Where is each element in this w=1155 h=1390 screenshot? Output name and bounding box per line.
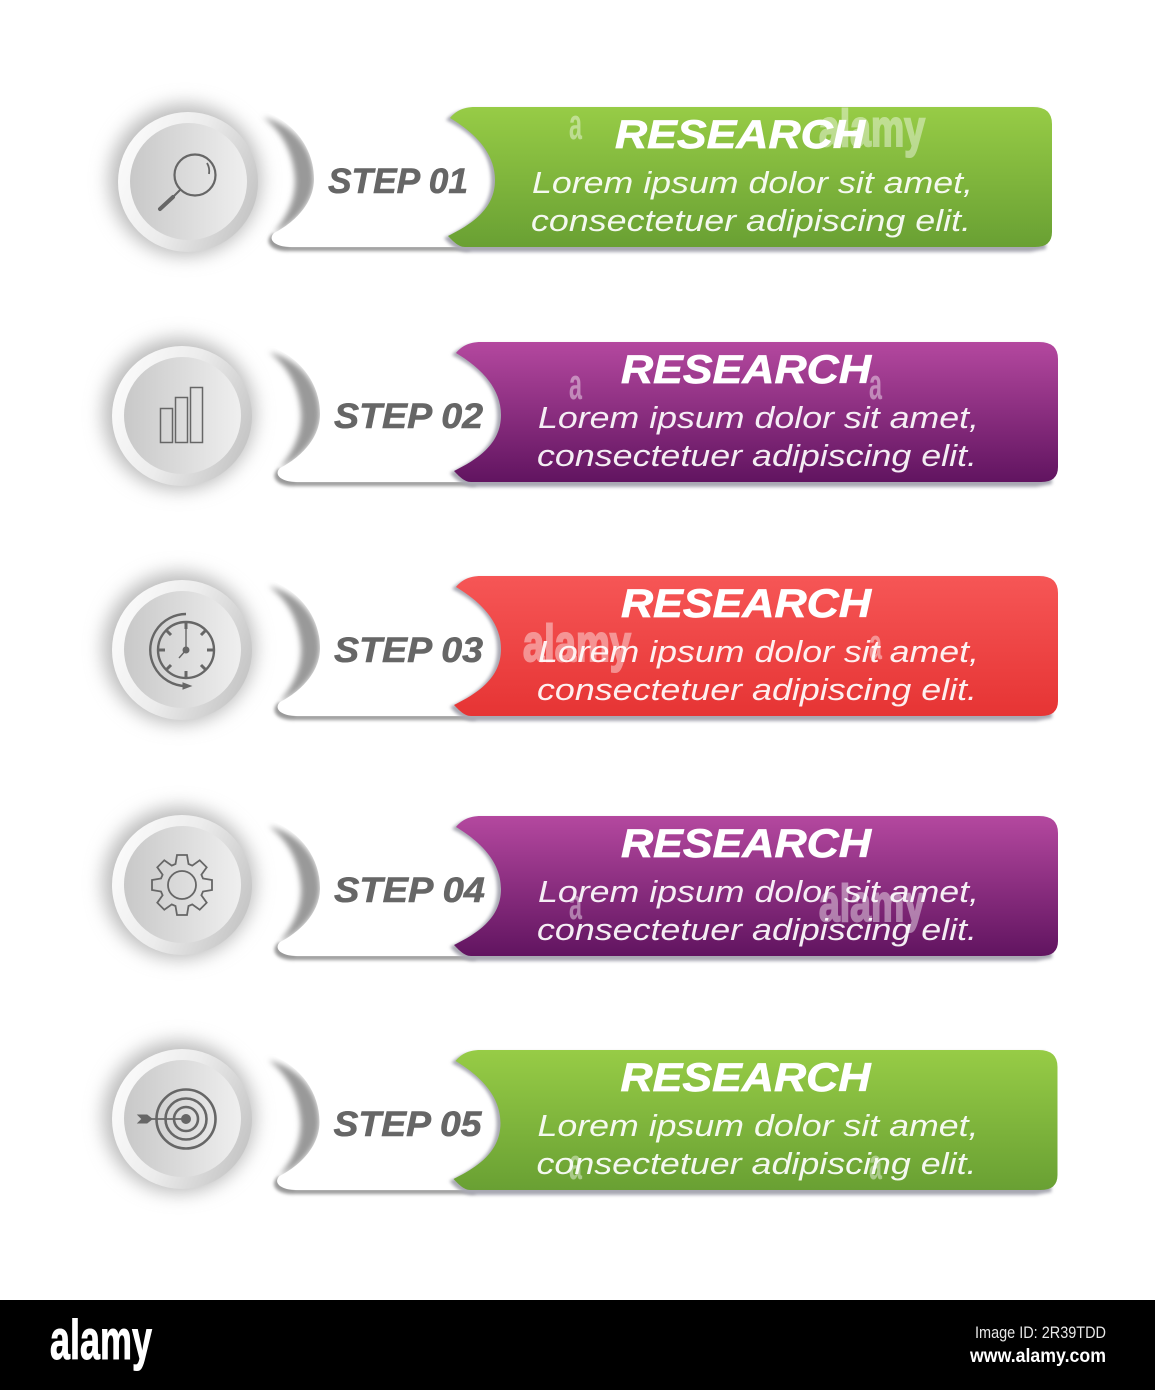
watermarks: a [869, 620, 882, 669]
heading 2: RESEARCH [621, 348, 872, 392]
body text 1: consectetuer adipiscing elit. [531, 203, 971, 238]
body text 2: consectetuer adipiscing elit. [537, 438, 977, 473]
icon: clock [150, 614, 214, 689]
body text 3: Lorem ipsum dolor sit amet, [538, 634, 979, 669]
step 01 row [109, 104, 1052, 256]
body text 5: consectetuer adipiscing elit. [536, 1146, 976, 1181]
step tab 5 [268, 1055, 486, 1194]
step 02 row [103, 338, 1058, 490]
panel: purple research 4 [450, 816, 1058, 961]
step 05 row [103, 1041, 1058, 1195]
watermarks [523, 100, 925, 1189]
body text 5: Lorem ipsum dolor sit amet, [538, 1108, 978, 1143]
watermarks: alamy [819, 100, 925, 158]
footer url: www.alamy.com [969, 1346, 1106, 1367]
step tab 1 [263, 112, 480, 251]
body text 1 [531, 165, 973, 238]
body text 3 [537, 634, 979, 707]
body text 4: Lorem ipsum dolor sit amet, [538, 874, 979, 909]
footer logo: alamy [50, 1308, 152, 1371]
watermarks: a [869, 1140, 882, 1189]
watermarks: a [569, 360, 582, 409]
heading 4: RESEARCH [621, 822, 872, 866]
heading 5: RESEARCH [620, 1056, 872, 1100]
circle badge 2 [103, 338, 255, 490]
step tab 3 [269, 581, 486, 720]
watermarks: a [569, 880, 582, 929]
watermarks: alamy [523, 615, 631, 673]
circle badge 5 [103, 1041, 255, 1193]
circle badge 1 [109, 104, 261, 256]
heading 3: RESEARCH [621, 582, 872, 626]
panel: purple research 2 [450, 342, 1058, 487]
body text 2: Lorem ipsum dolor sit amet, [538, 400, 979, 435]
step label 4: STEP 04 [334, 871, 485, 910]
heading 1: RESEARCH [615, 113, 866, 157]
body text 4: consectetuer adipiscing elit. [537, 912, 977, 947]
icon: target [138, 1090, 216, 1148]
step label 2: STEP 02 [334, 397, 484, 436]
step label 1: STEP 01 [328, 162, 468, 201]
footer bar [0, 1300, 1155, 1390]
body text 3: consectetuer adipiscing elit. [537, 672, 977, 707]
body text 4 [537, 874, 979, 947]
watermarks: a [869, 360, 882, 409]
icon: gear [152, 855, 212, 915]
step 04 row [103, 807, 1058, 961]
body text 1: Lorem ipsum dolor sit amet, [532, 165, 973, 200]
icon: bar chart [160, 388, 202, 442]
step tab 2 [269, 347, 486, 486]
panel: green research 5 [450, 1050, 1058, 1195]
body text 5 [536, 1108, 978, 1181]
circle badge 3 [103, 572, 255, 724]
panel: green research 1 [444, 107, 1052, 252]
step label 3: STEP 03 [334, 631, 484, 670]
body text 2 [537, 400, 979, 473]
image id: Image ID: 2R39TDD [975, 1323, 1106, 1342]
watermarks: alamy [819, 875, 925, 933]
circle badge 4 [103, 807, 255, 959]
step tab 4 [269, 821, 486, 960]
panel: red research 3 [450, 576, 1058, 721]
step 03 row [103, 572, 1058, 724]
icon: magnifier [160, 154, 216, 209]
watermarks: a [569, 1140, 582, 1189]
step label 5: STEP 05 [334, 1105, 482, 1144]
watermarks: a [569, 100, 582, 149]
